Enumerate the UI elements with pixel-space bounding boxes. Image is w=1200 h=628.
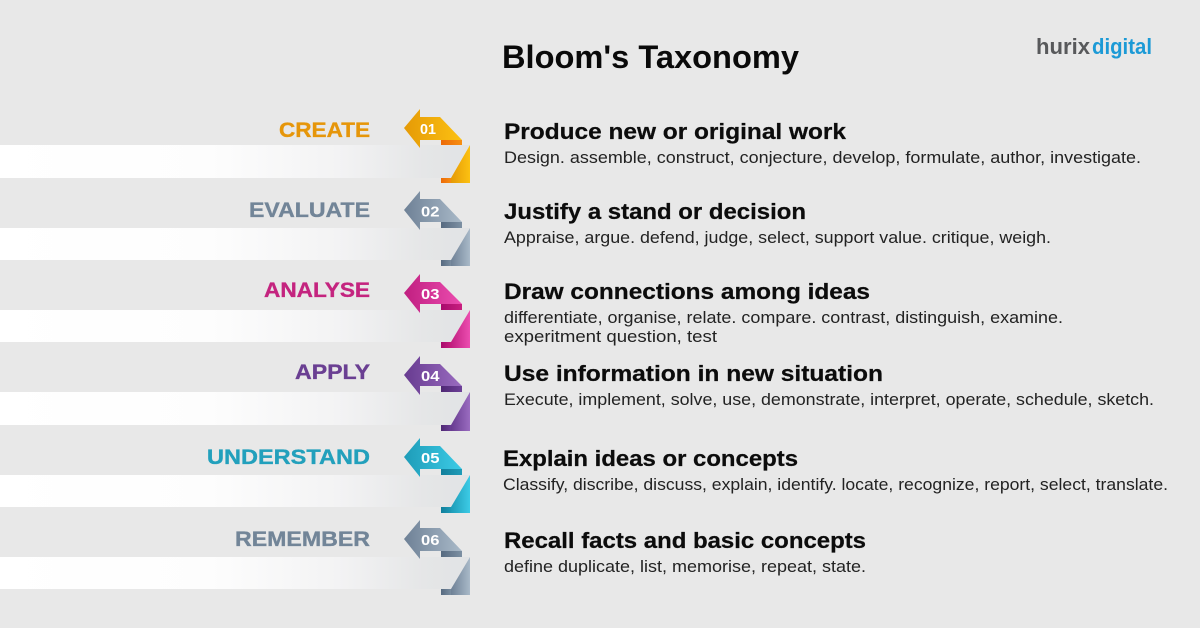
description 4: Execute, implement, solve, use, demonstrate, interpret, operate, schedule, sketch. [504, 391, 1154, 409]
row 4: apply [0, 356, 1154, 431]
heading 5: Explain ideas or concepts [503, 446, 798, 471]
arrow badge 2 [404, 191, 470, 266]
arrow badge 6 [404, 520, 470, 595]
logo: hurix digital: hurix [1036, 34, 1091, 59]
row 3: analyse [0, 274, 1063, 348]
description 3: experitment question, test [504, 328, 718, 346]
description 3 [504, 309, 1063, 346]
heading 2: Justify a stand or decision [504, 199, 806, 224]
label: apply: APPLY [295, 361, 370, 384]
label: understand: UNDERSTAND [207, 446, 370, 469]
arrow badge 6: 06 [421, 533, 440, 549]
ribbon band 3 [0, 310, 470, 342]
row 6: remember [0, 520, 866, 595]
ribbon band 1 [0, 145, 470, 178]
description 2: Appraise, argue. defend, judge, select, support value. critique, weigh. [504, 229, 1051, 247]
arrow badge 4 [404, 356, 470, 431]
description 3: differentiate, organise, relate. compare. contrast, distinguish, examine. [504, 309, 1063, 327]
row 1: create [0, 109, 1141, 183]
ribbon band 6 [0, 557, 470, 589]
title: Bloom's Taxonomy [502, 39, 799, 75]
ribbon band 5 [0, 475, 470, 507]
arrow badge 5: 05 [421, 451, 440, 467]
label: evaluate: EVALUATE [249, 199, 370, 222]
ribbon band 4 [0, 392, 470, 425]
arrow badge 3 [404, 274, 470, 348]
logo: hurix digital [1036, 34, 1152, 59]
label: analyse: ANALYSE [264, 279, 370, 302]
label: remember: REMEMBER [235, 528, 370, 551]
description 5: Classify, discribe, discuss, explain, identify. locate, recognize, report, select, translate. [503, 476, 1168, 494]
ribbon band 2 [0, 228, 470, 260]
heading 3: Draw connections among ideas [504, 279, 870, 304]
logo: hurix digital: digital [1092, 34, 1152, 59]
arrow badge 4: 04 [421, 369, 440, 385]
arrow badge 1 [404, 109, 470, 183]
heading 6: Recall facts and basic concepts [504, 528, 866, 553]
row 5: understand [0, 438, 1168, 513]
label: create: CREATE [279, 119, 370, 142]
arrow badge 3: 03 [421, 287, 440, 303]
description 6: define duplicate, list, memorise, repeat, state. [504, 558, 866, 576]
heading 4: Use information in new situation [504, 361, 883, 386]
arrow badge 5 [404, 438, 470, 513]
description 1: Design. assemble, construct, conjecture, develop, formulate, author, investigate. [504, 149, 1141, 167]
arrow badge 1: 01 [420, 122, 436, 138]
row 2: evaluate [0, 191, 1051, 266]
arrow badge 2: 02 [421, 204, 440, 220]
heading 1: Produce new or original work [504, 119, 847, 144]
